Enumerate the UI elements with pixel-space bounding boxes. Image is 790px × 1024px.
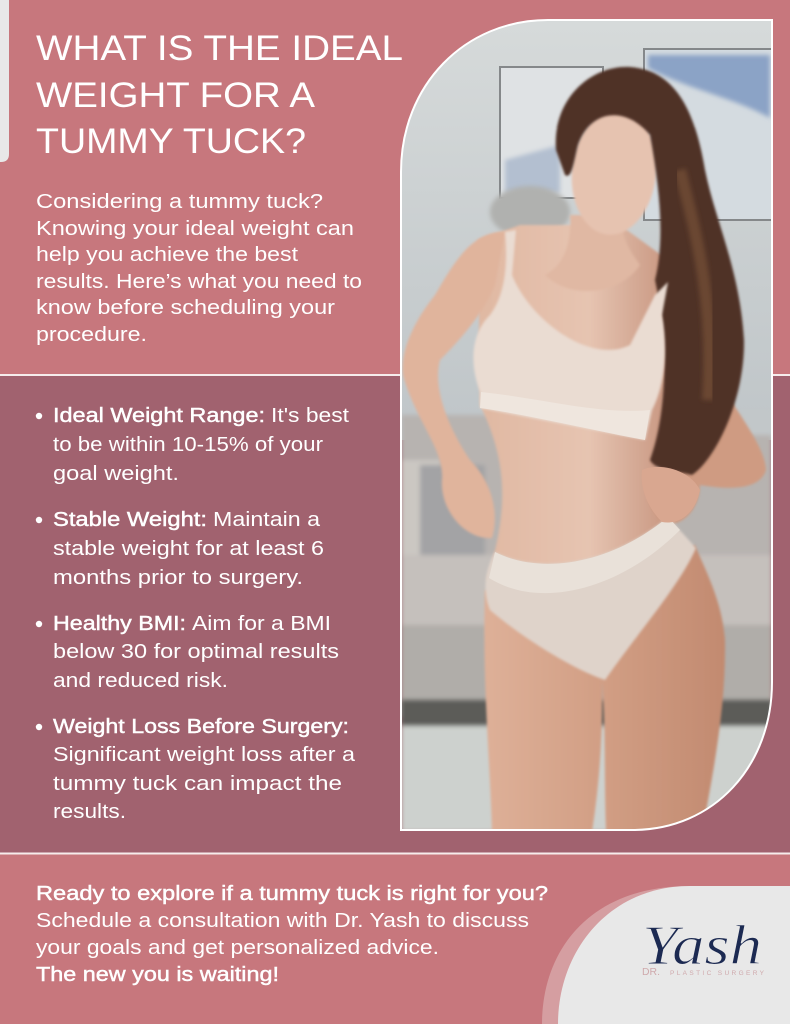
call to action text: Ready to explore if a tummy tuck is right for you? bbox=[36, 883, 548, 905]
bullet: weight loss before surgery bbox=[36, 716, 356, 823]
bullet: weight loss before surgery: Significant weight loss after a bbox=[53, 744, 356, 766]
photo: hand on garment bbox=[642, 467, 700, 523]
bullet: stable weight: months prior to surgery. bbox=[53, 567, 303, 589]
intro text: results. Here’s what you need to bbox=[36, 271, 362, 293]
bullet: healthy BMI: Healthy BMI: bbox=[53, 613, 186, 635]
divider: lower line bbox=[0, 852, 790, 854]
bullet: ideal weight range: It's best bbox=[271, 405, 349, 427]
bullet: weight loss before surgery: Weight Loss Before Surgery: bbox=[53, 716, 349, 738]
call to action text: your goals and get personalized advice. bbox=[36, 937, 439, 959]
bullet: healthy BMI: below 30 for optimal results bbox=[53, 641, 339, 663]
photo: right arm bbox=[673, 404, 767, 524]
photo: top garment bbox=[473, 230, 668, 440]
bullet: stable weight bbox=[36, 509, 324, 589]
divider: upper line bbox=[0, 374, 790, 376]
photo: lamp bbox=[490, 186, 570, 238]
intro text: procedure. bbox=[36, 324, 147, 346]
bullet: ideal weight range: Ideal Weight Range: bbox=[53, 405, 265, 427]
title: WHAT IS THE IDEAL bbox=[36, 29, 403, 68]
photo: floor bbox=[401, 700, 772, 832]
title: TUMMY TUCK? bbox=[36, 122, 306, 161]
photo: legs bbox=[484, 545, 725, 832]
photo: torso bbox=[478, 224, 666, 564]
bullet: healthy BMI bbox=[36, 613, 339, 692]
bullet: ideal weight range: to be within 10-15% of your bbox=[53, 434, 323, 456]
bullet: weight loss before surgery: results. bbox=[53, 801, 126, 823]
call to action text bbox=[36, 883, 548, 986]
intro text: know before scheduling your bbox=[36, 297, 335, 319]
photo: framed picture left bbox=[500, 67, 603, 198]
call to action text: Schedule a consultation with Dr. Yash to discuss bbox=[36, 910, 529, 932]
intro text: help you achieve the best bbox=[36, 244, 299, 266]
photo panel: person standing in a living room bbox=[401, 20, 772, 832]
photo: neck and head bbox=[545, 215, 640, 291]
bullet: ideal weight range: goal weight. bbox=[53, 463, 179, 485]
intro text: Considering a tummy tuck? bbox=[36, 191, 323, 213]
photo: room wall bbox=[401, 20, 772, 440]
photo: sofa bbox=[401, 410, 772, 717]
logo: PLASTIC SURGERY bbox=[670, 970, 765, 977]
title: WEIGHT FOR A bbox=[36, 76, 316, 115]
logo: Yash bbox=[642, 915, 762, 977]
photo: left arm bbox=[403, 232, 505, 538]
logo blob outer bbox=[542, 886, 790, 1024]
bullet: stable weight: Maintain a bbox=[213, 509, 321, 531]
title bbox=[36, 29, 403, 161]
intro text: Knowing your ideal weight can bbox=[36, 218, 354, 240]
intro text bbox=[36, 191, 362, 346]
logo: DR. bbox=[642, 967, 660, 978]
bullet: ideal weight range bbox=[36, 405, 349, 485]
corner tab bbox=[0, 0, 9, 162]
panel: middle background bbox=[0, 375, 790, 854]
logo blob inner bbox=[558, 886, 790, 1024]
photo: framed picture right bbox=[644, 49, 772, 220]
call to action text: The new you is waiting! bbox=[36, 964, 279, 986]
photo: lower garment bbox=[485, 517, 696, 680]
bullet: healthy BMI: Aim for a BMI bbox=[192, 613, 331, 635]
bullet: healthy BMI: and reduced risk. bbox=[53, 670, 228, 692]
panel: top background bbox=[0, 0, 790, 375]
photo border bbox=[401, 20, 772, 830]
bullet: stable weight: Stable Weight: bbox=[53, 509, 207, 531]
photo: hair bbox=[556, 67, 744, 475]
panel: footer background bbox=[0, 854, 790, 1024]
bullet: stable weight: stable weight for at least 6 bbox=[53, 538, 324, 560]
bullet: weight loss before surgery: tummy tuck can impact the bbox=[53, 773, 342, 795]
